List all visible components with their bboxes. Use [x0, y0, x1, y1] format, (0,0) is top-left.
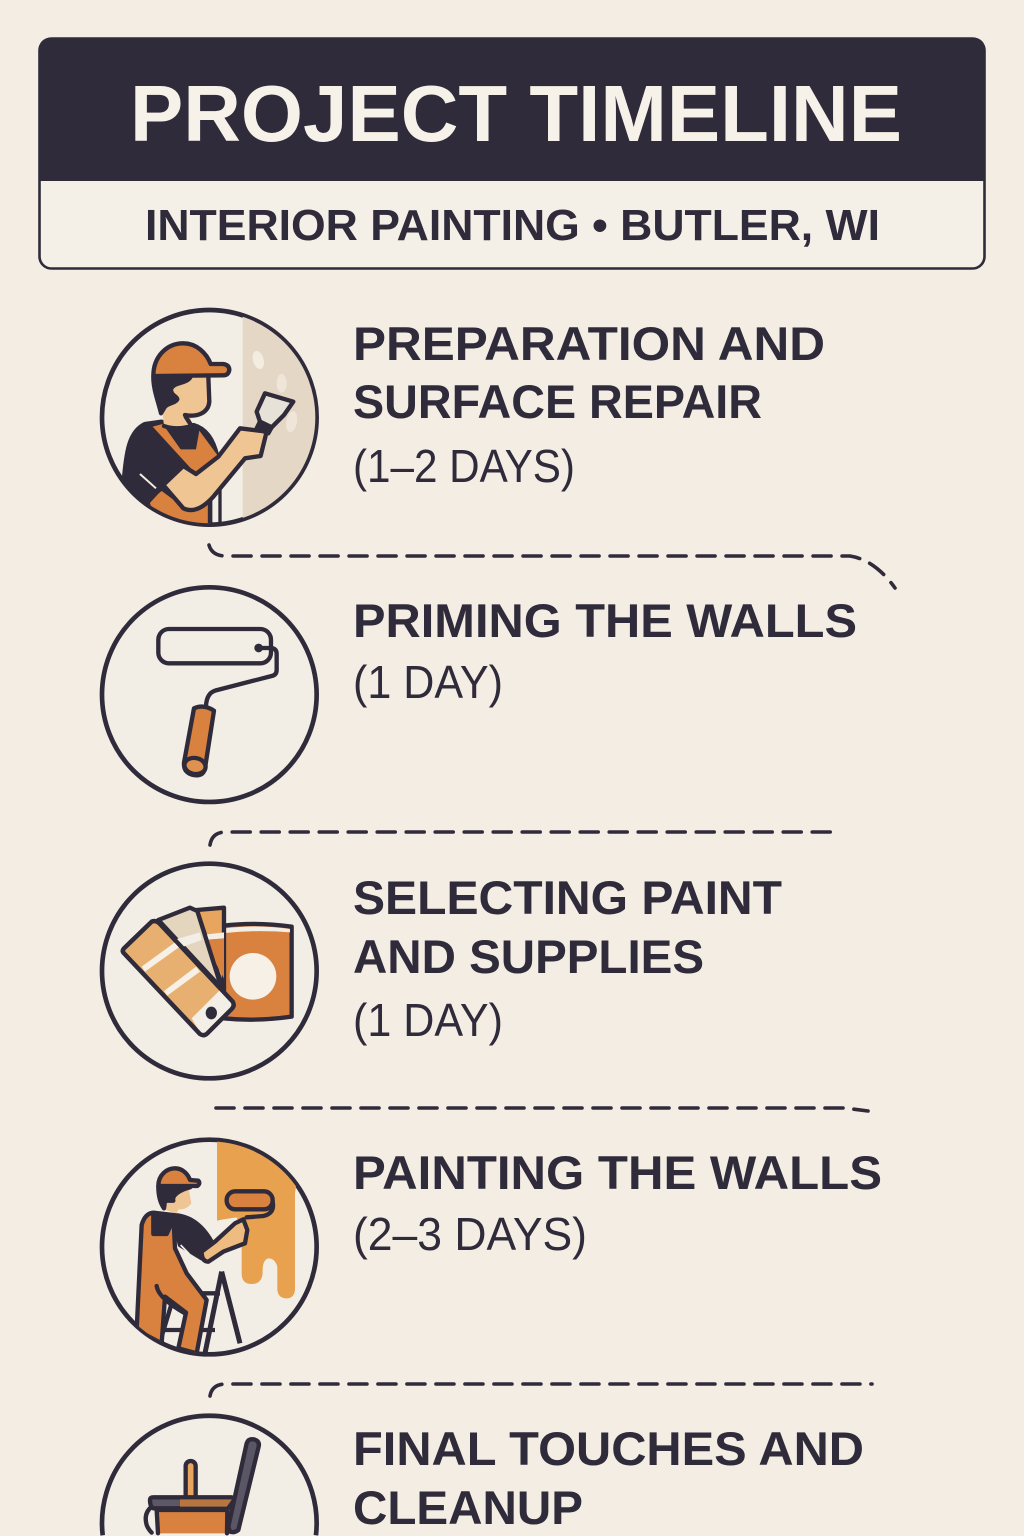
dashed connector 4 [210, 1384, 872, 1396]
duration: (1 DAY) [353, 656, 503, 708]
icon: painter on ladder [102, 1137, 317, 1354]
step 2: priming the walls [102, 587, 857, 802]
heading: PREPARATION AND [353, 317, 825, 370]
icon: paint bucket and brush [102, 1416, 317, 1535]
heading: PAINTING THE WALLS [353, 1146, 882, 1199]
heading line 2: CLEANUP [353, 1481, 583, 1534]
dashed connector 2 [210, 832, 838, 845]
heading line 2: SURFACE REPAIR [353, 375, 762, 428]
step 4: painting the walls [102, 1137, 882, 1354]
heading: SELECTING PAINT [353, 871, 782, 924]
step 5: final touches and cleanup [102, 1416, 864, 1535]
subtitle: INTERIOR PAINTING • BUTLER, WI [145, 201, 880, 250]
heading: FINAL TOUCHES AND [353, 1422, 864, 1475]
duration: (1 DAY) [353, 994, 503, 1046]
heading line 2: AND SUPPLIES [353, 930, 704, 983]
icon: worker with putty knife [102, 307, 329, 530]
dashed connector 3 [216, 1108, 868, 1111]
dashed connector 1 [209, 545, 895, 588]
icon: paint roller [102, 587, 317, 802]
duration: (1–2 DAYS) [353, 440, 575, 492]
duration: (2–3 DAYS) [353, 1208, 587, 1260]
title: PROJECT TIMELINE [130, 69, 902, 158]
header panel [39, 38, 985, 268]
icon: swatches and paint can [102, 864, 317, 1078]
heading: PRIMING THE WALLS [353, 594, 857, 647]
step 1: preparation and surface repair [102, 307, 825, 530]
step 3: selecting paint and supplies [102, 864, 782, 1078]
